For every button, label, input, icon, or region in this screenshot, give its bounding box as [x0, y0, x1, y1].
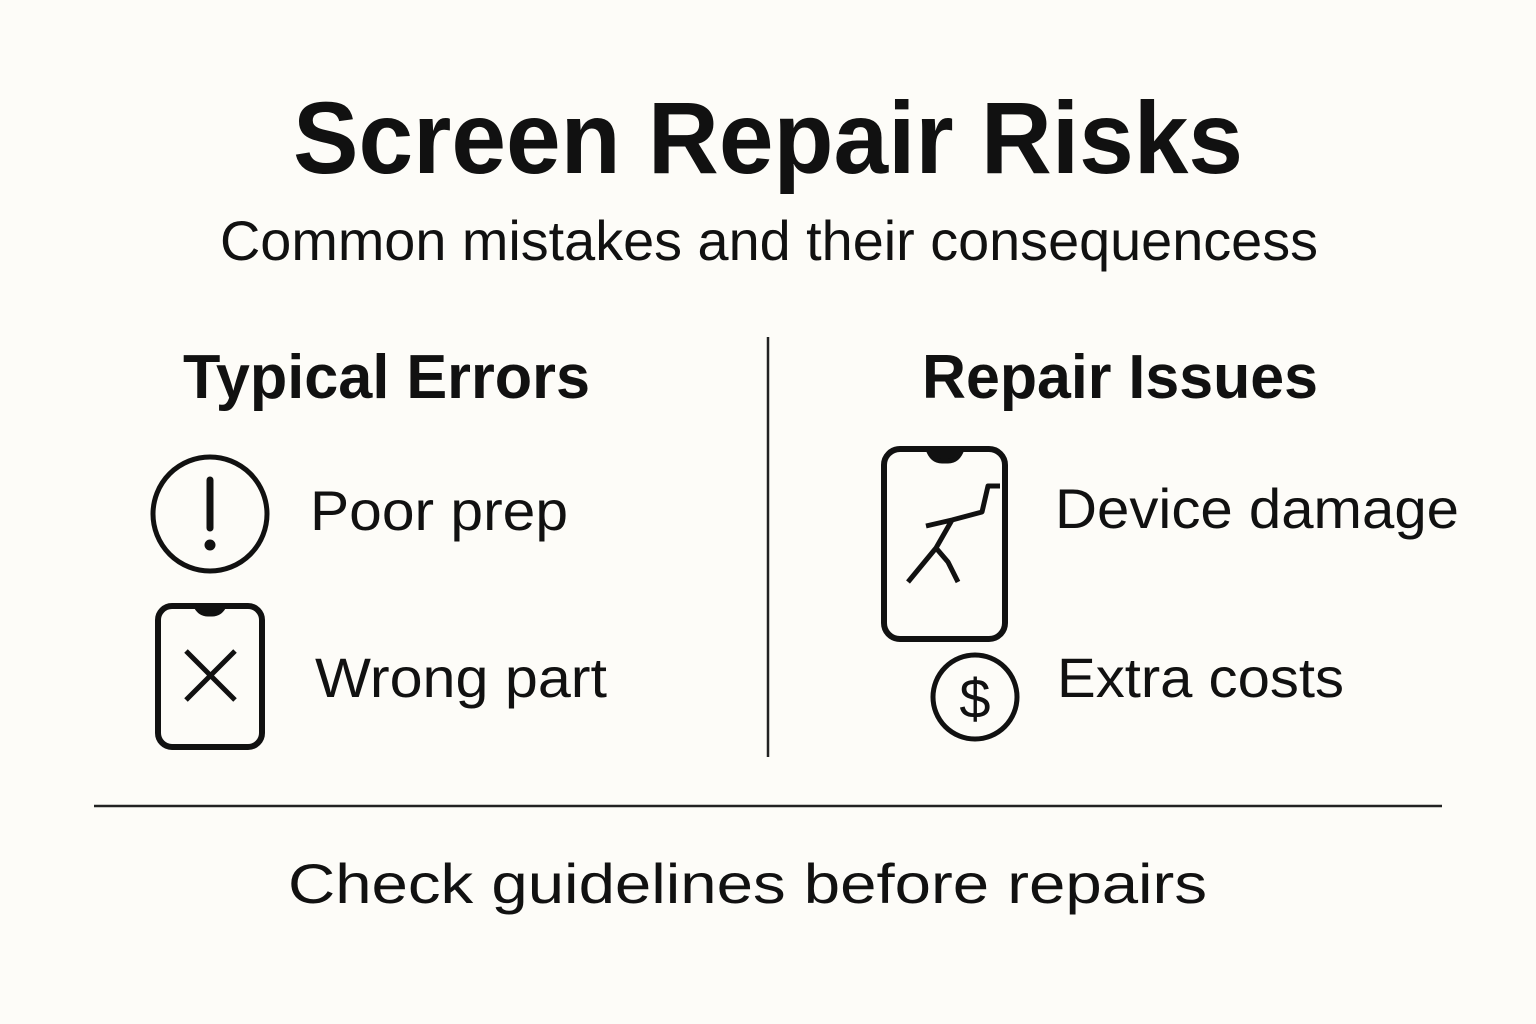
text: poor prep: Poor prep — [310, 479, 568, 542]
subtitle: Common mistakes and their consequencess — [220, 209, 1318, 272]
icon: exclamation circle — [153, 457, 267, 571]
footer text: Check guidelines before repairs — [288, 852, 1207, 915]
text: device damage: Device damage — [1055, 477, 1459, 540]
heading: typical errors: Typical Errors — [183, 343, 590, 412]
icon: dollar circle — [933, 655, 1017, 739]
icon: cracked phone — [884, 449, 1005, 639]
title: Screen Repair Risks — [293, 81, 1243, 195]
heading: repair issues: Repair Issues — [922, 343, 1318, 412]
icon: phone with x — [158, 606, 262, 747]
panel: repair issues — [884, 343, 1459, 739]
panel: typical errors — [153, 343, 607, 747]
text: extra costs: Extra costs — [1057, 646, 1344, 709]
icon: dollar circle: $ — [959, 667, 991, 730]
text: wrong part: Wrong part — [315, 646, 607, 709]
